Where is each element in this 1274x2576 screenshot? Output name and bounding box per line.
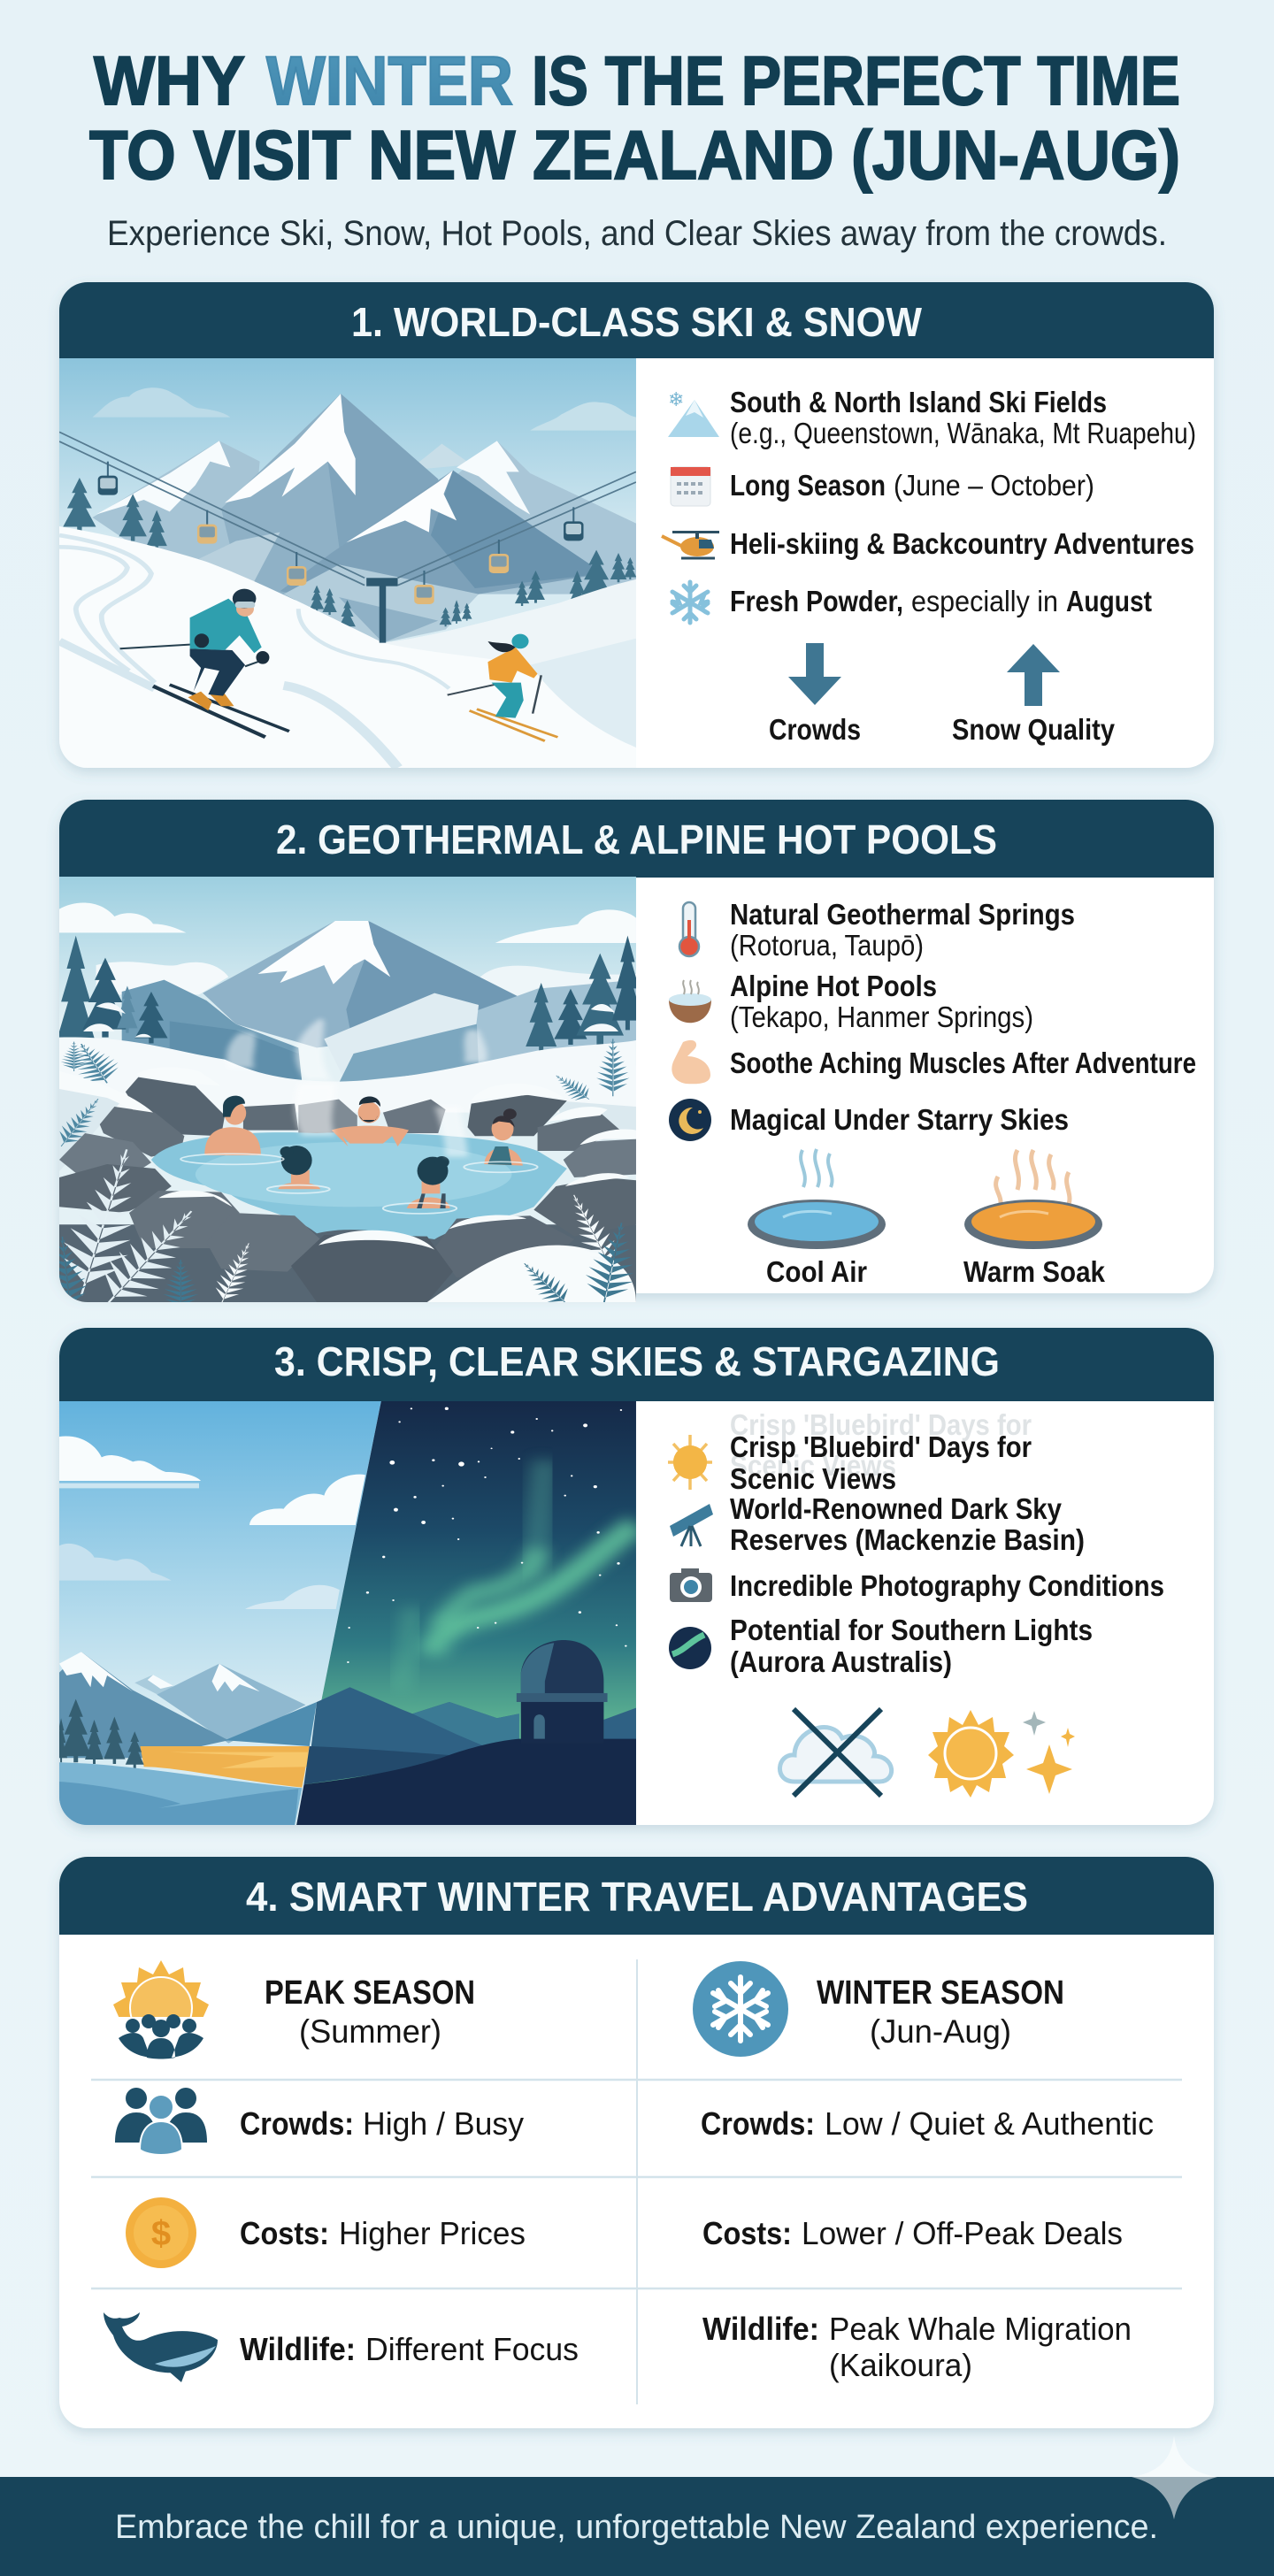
day side bbox=[55, 1401, 381, 1825]
title: WINTER bbox=[266, 42, 513, 119]
list: sky highlights: Crisp 'Bluebird' Days for bbox=[730, 1430, 1032, 1463]
comparison column: winter season bbox=[693, 1961, 1154, 2383]
panel: geothermal and alpine hot pools bbox=[42, 800, 1214, 1319]
illustration: ski slope with gondolas and skiers bbox=[59, 358, 636, 768]
list: ski highlights: Heli-skiing & Backcountry Adventures bbox=[730, 527, 1194, 560]
panel 2 header bbox=[59, 800, 1214, 878]
list: sky highlights: World-Renowned Dark Sky bbox=[730, 1492, 1063, 1525]
list: hot pool highlights: Alpine Hot Pools bbox=[730, 970, 937, 1002]
comparison column: winter season: (Jun-Aug) bbox=[870, 2013, 1011, 2050]
panel 4 header: 4. SMART WINTER TRAVEL ADVANTAGES bbox=[246, 1874, 1028, 1920]
list: hot pool highlights: (Tekapo, Hanmer Springs) bbox=[730, 1000, 1033, 1033]
list: ski highlights: Long Season bbox=[730, 469, 886, 502]
comparison column: peak season: Wildlife: bbox=[240, 2331, 356, 2367]
list: ski highlights bbox=[662, 386, 1196, 623]
panel: crisp clear skies and stargazing bbox=[55, 1328, 1214, 1825]
comparison column: peak season: (Summer) bbox=[299, 2013, 441, 2050]
list: ski highlights: Fresh Powder, bbox=[730, 585, 903, 617]
list: sky highlights: Scenic Views bbox=[730, 1462, 896, 1495]
icon: cool pool with steam: Cool Air bbox=[766, 1255, 867, 1288]
list: ski highlights: especially in bbox=[911, 585, 1058, 617]
list: ski highlights: South & North Island Ski Fields bbox=[730, 386, 1107, 418]
decorative sparkle bbox=[1132, 2435, 1217, 2519]
comparison column: peak season: Higher Prices bbox=[339, 2215, 526, 2251]
list: ski highlights: (June – October) bbox=[894, 469, 1094, 502]
list: hot pool highlights: Natural Geothermal Springs bbox=[730, 898, 1075, 931]
icon: snowflake bbox=[672, 582, 708, 623]
list: ski highlights: August bbox=[1066, 585, 1152, 617]
panel 4 header bbox=[59, 1857, 1214, 1935]
list: hot pool highlights bbox=[669, 898, 1196, 1141]
icon: whale bbox=[104, 2312, 218, 2382]
comparison column: peak season: High / Busy bbox=[363, 2105, 524, 2142]
steam bbox=[226, 1018, 487, 1157]
list: sky highlights: Reserves (Mackenzie Basin) bbox=[730, 1523, 1085, 1556]
icon: hot pool bowl bbox=[669, 980, 711, 1023]
icon: telescope bbox=[670, 1504, 713, 1546]
panel 1 header bbox=[59, 282, 1214, 358]
comparison column: winter season: WINTER SEASON bbox=[817, 1974, 1064, 2012]
panel: smart winter travel advantages bbox=[59, 1857, 1214, 2428]
list: sky highlights: Incredible Photography Conditions bbox=[730, 1569, 1164, 1602]
illustration: hot pool with bathers bbox=[42, 877, 646, 1319]
arrow: snow quality up: Snow Quality bbox=[952, 713, 1116, 746]
comparison column: winter season: Lower / Off-Peak Deals bbox=[802, 2215, 1123, 2251]
icon: coin: $ bbox=[151, 2214, 171, 2253]
icon: thermometer bbox=[679, 902, 699, 956]
panel: world-class ski and snow bbox=[59, 282, 1214, 768]
list: hot pool highlights: Magical Under Starry Skies bbox=[730, 1103, 1069, 1136]
bathers bbox=[204, 1096, 523, 1208]
icon: sun bbox=[668, 1435, 712, 1490]
panel 3 header bbox=[59, 1328, 1214, 1401]
comparison column: peak season: PEAK SEASON bbox=[265, 1974, 475, 2012]
icon: warm pool with steam: Warm Soak bbox=[963, 1255, 1106, 1288]
icon: snowflake badge bbox=[693, 1961, 788, 2057]
icon: sun and sparkles bbox=[928, 1710, 1075, 1798]
comparison column: winter season: (Kaikoura) bbox=[829, 2347, 972, 2383]
icon: coin bbox=[126, 2197, 196, 2268]
list: hot pool highlights: Soothe Aching Muscles After Adventure bbox=[730, 1046, 1196, 1079]
list: ski highlights: (e.g., Queenstown, Wānaka, Mt Ruapehu) bbox=[730, 417, 1196, 449]
night side bbox=[296, 1401, 636, 1825]
icon: mountain with snowflake bbox=[668, 388, 719, 437]
ghost text echo: Crisp 'Bluebird' Days for bbox=[730, 1408, 1032, 1441]
comparison column: winter season: Crowds: bbox=[701, 2105, 815, 2142]
observatory bbox=[517, 1640, 608, 1744]
list: sky highlights: (Aurora Australis) bbox=[730, 1645, 952, 1678]
footer banner: Embrace the chill for a unique, unforgettable New Zealand experience. bbox=[115, 2509, 1158, 2546]
icon: aurora orb bbox=[669, 1627, 711, 1669]
footer banner bbox=[0, 2477, 1274, 2576]
skier in orange jacket bbox=[448, 634, 557, 741]
comparison column: winter season: Low / Quiet & Authentic bbox=[825, 2105, 1154, 2142]
illustration: day and night sky split bbox=[55, 1401, 636, 1825]
list: sky highlights: Scenic Views bbox=[730, 1449, 896, 1482]
icon: calendar bbox=[671, 467, 710, 506]
title bbox=[89, 42, 1180, 194]
arrow: snow quality up bbox=[952, 644, 1116, 746]
comparison column: peak season: Crowds: bbox=[240, 2105, 354, 2142]
icon: crossed out cloud bbox=[779, 1709, 892, 1796]
comparison column: winter season: Peak Whale Migration bbox=[829, 2311, 1132, 2347]
title: WHY bbox=[94, 42, 245, 119]
icon: moon bbox=[669, 1099, 711, 1141]
title: TO VISIT NEW ZEALAND (JUN-AUG) bbox=[89, 116, 1180, 194]
icon: warm pool with steam bbox=[963, 1150, 1106, 1288]
icon: crowd bbox=[115, 2088, 207, 2155]
comparison column: peak season: Different Focus bbox=[365, 2331, 579, 2367]
icon: sun over crowd bbox=[111, 1960, 211, 2061]
comparison column: peak season bbox=[104, 1960, 579, 2382]
subtitle: Experience Ski, Snow, Hot Pools, and Clear Skies away from the crowds. bbox=[107, 214, 1167, 253]
icon: mountain with snowflake: ❄ bbox=[668, 388, 684, 410]
icon: cool pool with steam bbox=[748, 1149, 886, 1288]
comparison column: winter season: Costs: bbox=[702, 2215, 792, 2251]
list: sky highlights: Potential for Southern Lights bbox=[730, 1614, 1093, 1646]
skier in teal jacket bbox=[120, 589, 289, 737]
pool water bbox=[151, 1132, 567, 1239]
panel 3 header: 3. CRISP, CLEAR SKIES & STARGAZING bbox=[274, 1338, 1000, 1384]
comparison column: winter season: Wildlife: bbox=[702, 2311, 819, 2347]
icon: flexed arm bbox=[672, 1040, 710, 1084]
rock ring bbox=[59, 1077, 636, 1302]
arrow: crowds down bbox=[769, 643, 861, 746]
title: IS THE PERFECT TIME bbox=[532, 42, 1180, 119]
panel 1 header: 1. WORLD-CLASS SKI & SNOW bbox=[351, 299, 923, 345]
icon: helicopter bbox=[662, 531, 719, 558]
list: hot pool highlights: (Rotorua, Taupō) bbox=[730, 929, 924, 962]
list: sky highlights bbox=[668, 1408, 1164, 1678]
panel 2 header: 2. GEOTHERMAL & ALPINE HOT POOLS bbox=[276, 816, 997, 862]
comparison column: peak season: Costs: bbox=[240, 2215, 329, 2251]
icon: camera bbox=[670, 1568, 712, 1602]
ferns bbox=[59, 1149, 633, 1302]
arrow: crowds down: Crowds bbox=[769, 713, 861, 746]
